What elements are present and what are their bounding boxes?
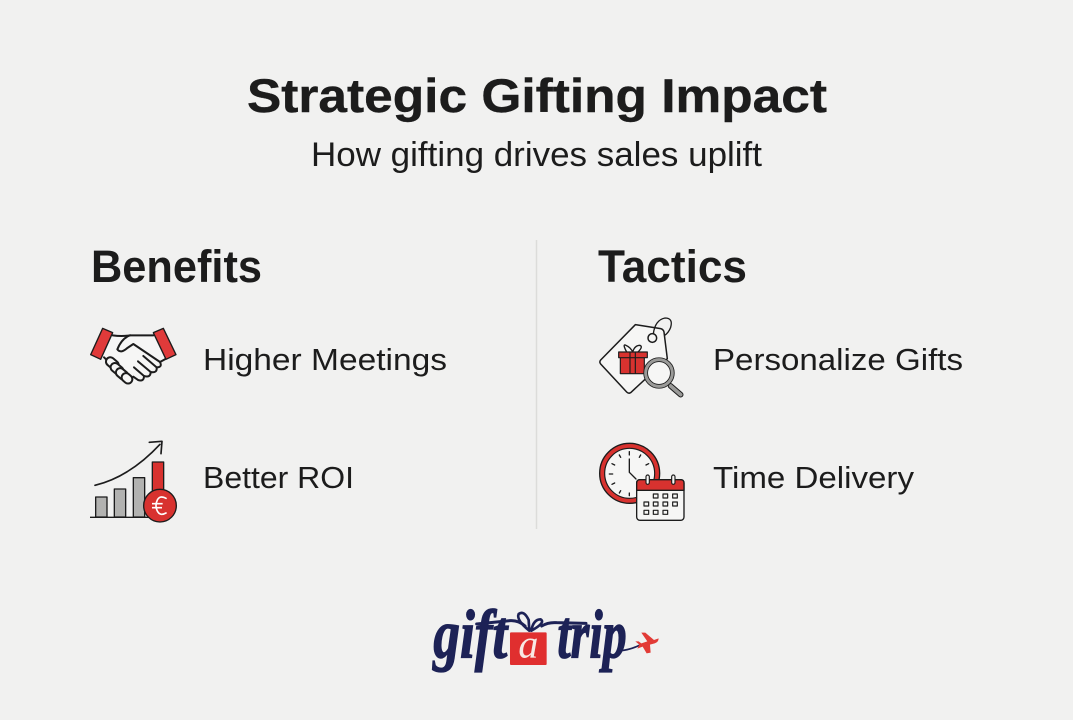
title: Strategic Gifting Impact — [247, 69, 827, 122]
logo: gift a trip: trip — [557, 596, 627, 672]
subtitle: How gifting drives sales uplift — [311, 136, 763, 174]
logo: gift a trip — [432, 596, 659, 672]
label: time delivery: Time Delivery — [713, 460, 915, 495]
panel: tactics — [598, 241, 963, 520]
icon: bar chart with euro coin — [90, 441, 176, 522]
logo: gift a trip: gift — [432, 596, 509, 672]
icon: handshake — [91, 328, 176, 385]
icon: gift tag with magnifier — [600, 318, 681, 395]
heading: tactics: Tactics — [598, 241, 747, 292]
icon: clock and calendar — [600, 443, 684, 520]
panel: benefits — [90, 241, 447, 522]
label: higher meetings: Higher Meetings — [203, 342, 447, 377]
heading: benefits: Benefits — [91, 241, 262, 292]
logo: gift a trip: a — [518, 621, 538, 666]
label: personalize gifts: Personalize Gifts — [713, 342, 963, 377]
label: better roi: Better ROI — [203, 460, 354, 495]
